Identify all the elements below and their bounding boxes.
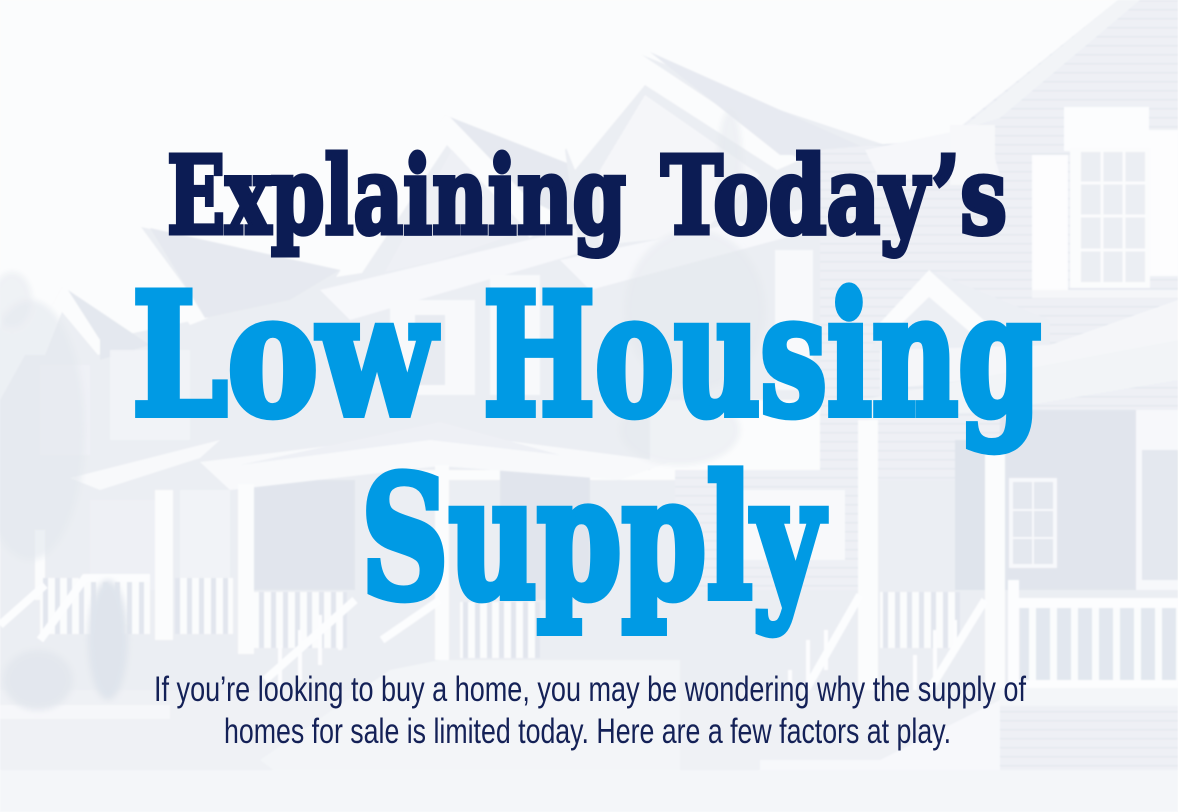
intro text: homes for sale is limited today. Here are a few factors at play. (224, 712, 951, 751)
railings (0, 578, 1178, 770)
title: Low Housing (132, 256, 1041, 454)
porch walls (0, 410, 1178, 690)
shutters and window (1032, 107, 1178, 298)
title: Explaining Today's: Explaining (167, 134, 626, 259)
trees and shrubs (0, 110, 765, 710)
center gable house (560, 52, 945, 400)
porch columns (35, 420, 1005, 760)
foundation and steps (0, 660, 1178, 812)
title: Explaining Today's: Today’s (661, 134, 1007, 259)
right large house (820, 0, 1178, 812)
porch roofs (70, 340, 1178, 490)
second gable house (300, 115, 650, 470)
far left house (0, 227, 400, 560)
small front gable (870, 270, 1050, 360)
title: Supply: Supply (361, 439, 826, 637)
intro text (154, 670, 1026, 751)
title: Low Housing: Low (132, 256, 438, 454)
